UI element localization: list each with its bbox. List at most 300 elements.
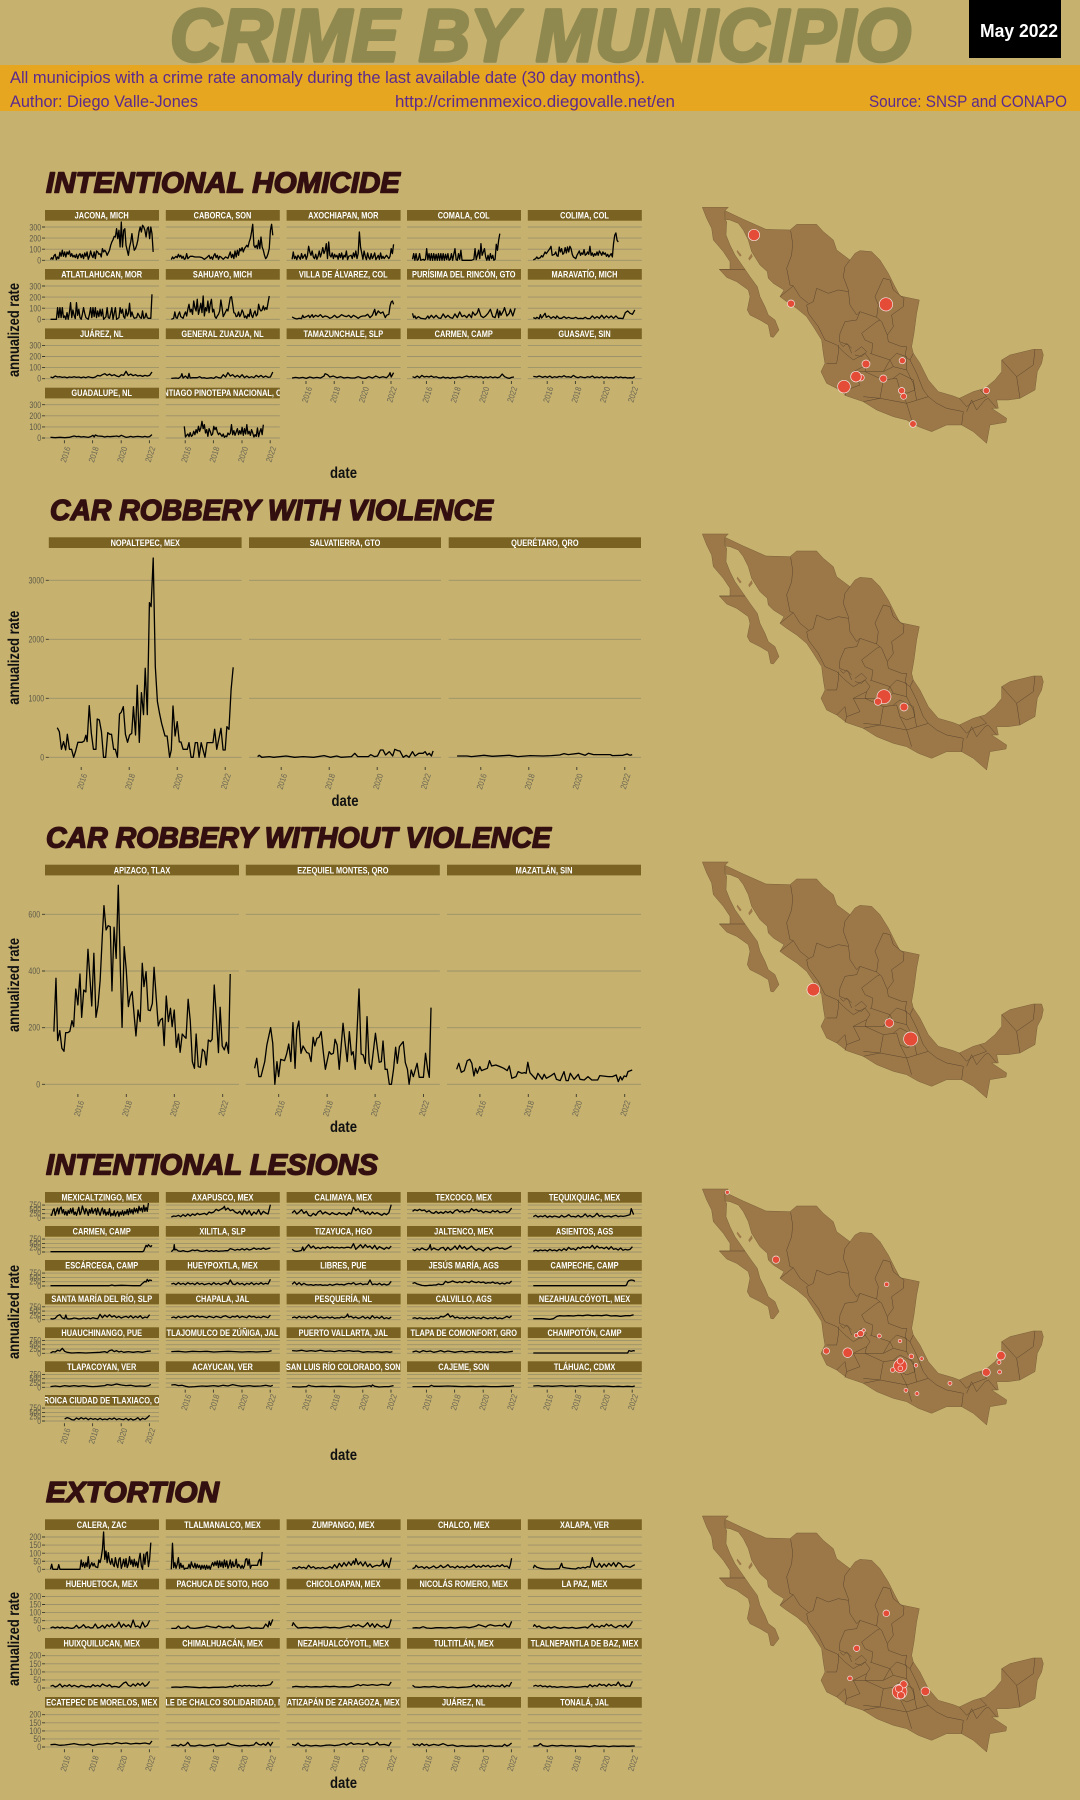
panel: Tamazunchale: 2020: [357, 385, 371, 404]
panel: Hueypoxtla: [166, 1260, 280, 1286]
panel: Apizaco: 2022: [216, 1099, 231, 1117]
panel: Calera: 150: [29, 1540, 42, 1550]
panel: Salvatierra: [249, 537, 441, 791]
panel: Heroica Ciudad de Tlaxiaco: 2020: [115, 1426, 130, 1445]
panel: Huauchinango: 500: [29, 1340, 42, 1350]
panel: Jacona: [29, 210, 159, 266]
panel: Jacona: JACONA, MICH: [75, 211, 129, 221]
panel: Tlahuac: 2016: [541, 1393, 556, 1412]
panel: Heroica Ciudad de Tlaxiaco: 0: [37, 1416, 42, 1426]
panel: Santiago Pinotepa Nacional: 2016: [179, 445, 194, 464]
panel: Guadalupe: 300: [29, 400, 42, 410]
panel: Huixquilucan: 150: [29, 1659, 42, 1669]
panel: Nopaltepec: 2022: [219, 772, 233, 790]
panel: Tamazunchale: 2016: [300, 385, 315, 404]
panel: Atlatlahucan: 300: [29, 281, 42, 292]
panel: Tonala: 2020: [598, 1754, 613, 1773]
info banner: All municipios with a crime rate anomaly during the last available date (30 day months).: [10, 68, 645, 87]
panel: Axapusco: [166, 1192, 280, 1218]
panel: Nicolas Romero: NICOLÁS ROMERO, MEX: [420, 1578, 508, 1589]
panel: Cajeme: CAJEME, SON: [438, 1362, 489, 1372]
panel: Ecatepec: 2020: [115, 1754, 130, 1773]
panel: Queretaro: 2018: [523, 772, 537, 791]
panel: Sahuayo: SAHUAYO, MICH: [193, 270, 252, 280]
panel: Tonala: [528, 1697, 642, 1773]
x axis title: date: [330, 465, 357, 482]
panel: Tamazunchale: [287, 328, 401, 404]
panel: La Paz: LA PAZ, MEX: [562, 1580, 608, 1589]
chart: intentional homicide small multiples: [6, 210, 642, 482]
heading: car robbery without violence: CAR ROBBERY WITHOUT VIOLENCE: [46, 822, 553, 854]
panel: Jacona: 300: [29, 222, 42, 233]
panel: Juarez (extortion): [407, 1697, 521, 1773]
panel: Juarez (extortion): 2018: [449, 1754, 463, 1773]
panel: Guasave: 2016: [541, 385, 556, 404]
panel: Huehuetoca: 150: [29, 1600, 42, 1610]
panel: Atlatlahucan: 100: [29, 303, 42, 314]
panel: Escarcega: [29, 1260, 159, 1291]
panel: Escarcega: 750: [29, 1268, 42, 1278]
panel: Villa de Alvarez: [287, 269, 401, 319]
panel: Juarez: 0: [37, 374, 42, 384]
panel: Guadalupe: 2020: [115, 445, 130, 464]
panel: Salvatierra: 2016: [275, 772, 290, 791]
panel: Juarez: JUÁREZ, NL: [80, 328, 123, 339]
panel: Guasave: GUASAVE, SIN: [558, 329, 611, 339]
panel: Heroica Ciudad de Tlaxiaco: 2016: [59, 1426, 73, 1445]
panel: Acayucan: [166, 1361, 280, 1412]
info banner: [0, 65, 1080, 111]
panel: Santiago Pinotepa Nacional: 2018: [208, 445, 222, 464]
panel: Santa Maria del Rio: 250: [29, 1311, 42, 1321]
panel: San Luis Rio Colorado: 2016: [300, 1393, 315, 1412]
panel: Tonala: 2016: [541, 1754, 556, 1773]
panel: Jacona: 200: [29, 233, 42, 244]
panel: Heroica Ciudad de Tlaxiaco: 500: [29, 1408, 42, 1418]
panel: Xalapa: [528, 1519, 642, 1569]
panel: Axochiapan: [287, 210, 401, 260]
panel: Acayucan: 2018: [208, 1393, 222, 1412]
panel: Texcoco: TEXCOCO, MEX: [435, 1193, 492, 1203]
panel: Salvatierra: 2018: [323, 772, 338, 791]
panel: Santa Maria del Rio: 750: [29, 1302, 42, 1312]
panel: Ezequiel Montes: 2016: [273, 1099, 287, 1118]
panel: Calimaya: CALIMAYA, MEX: [315, 1193, 373, 1203]
panel: Huixquilucan: 200: [29, 1651, 42, 1661]
panel: Santiago Pinotepa Nacional: 2020: [236, 445, 251, 464]
panel: Mexicaltzingo: 0: [37, 1213, 42, 1223]
panel: Guadalupe: 100: [29, 422, 42, 432]
panel: Escarcega: 500: [29, 1273, 42, 1283]
panel: Mexicaltzingo: MEXICALTZINGO, MEX: [61, 1193, 142, 1203]
panel: Acayucan: 2022: [264, 1393, 278, 1411]
panel: Huehuetoca: [29, 1579, 159, 1634]
x axis title: date: [332, 793, 359, 810]
map: extortion: [702, 1516, 1043, 1752]
panel: Ecatepec: 0: [37, 1742, 42, 1752]
panel: Nopaltepec: 0: [40, 752, 45, 763]
panel: Calvillo: CALVILLO, AGS: [436, 1295, 492, 1304]
panel: Apizaco: 2018: [120, 1099, 135, 1118]
panel: Texcoco: [407, 1192, 521, 1218]
panel: Cajeme: 2022: [505, 1393, 519, 1411]
panel: Tamazunchale: 2022: [385, 385, 399, 404]
chart: extortion small multiples: [6, 1519, 642, 1792]
panel: Tonala: 2022: [626, 1754, 640, 1772]
panel: Juarez: 300: [29, 341, 42, 351]
map: intentional lesions: [702, 1189, 1043, 1425]
panel: Queretaro: 2022: [619, 772, 633, 790]
panel: Valle de Chalco: VALLE DE CHALCO SOLIDARIDAD, MEX: [151, 1698, 294, 1708]
panel: Nopaltepec: [29, 537, 242, 791]
panel: Tlapacoyan: TLAPACOYAN, VER: [67, 1362, 136, 1372]
panel: Tlapa: [407, 1327, 521, 1353]
y axis title: annualized rate: [6, 938, 23, 1032]
y axis title: annualized rate: [6, 1592, 23, 1686]
panel: Nezahualcoyotl (lesions): NEZAHUALCÓYOTL, MEX: [539, 1292, 631, 1304]
panel: Huixquilucan: 50: [33, 1675, 42, 1685]
panel: Sahuayo: [166, 269, 280, 319]
panel: Heroica Ciudad de Tlaxiaco: 250: [29, 1412, 42, 1422]
panel: Huehuetoca: HUEHUETOCA, MEX: [66, 1580, 138, 1589]
panel: Acayucan: 2016: [179, 1393, 194, 1412]
heading: car robbery with violence: CAR ROBBERY WITH VIOLENCE: [50, 495, 495, 527]
panel: Atlatlahucan: [29, 269, 159, 325]
panel: Santa Maria del Rio: 500: [29, 1306, 42, 1316]
panel: Ecatepec: 50: [33, 1734, 42, 1744]
panel: Maravatio: [528, 269, 642, 319]
panel: Tequixquiac: [528, 1192, 642, 1218]
panel: Tonala: 2018: [570, 1754, 584, 1773]
panel: Juarez: 100: [29, 363, 42, 373]
panel: Guadalupe: 200: [29, 411, 42, 421]
panel: Carmen: CARMEN, CAMP: [435, 329, 493, 339]
panel: Cajeme: 2016: [421, 1393, 435, 1412]
panel: Tultitlan: TULTITLÁN, MEX: [434, 1638, 494, 1649]
x axis title: date: [330, 1447, 357, 1464]
panel: Queretaro: 2016: [475, 772, 489, 791]
panel: Escarcega: ESCÁRCEGA, CAMP: [65, 1260, 139, 1271]
panel: Juarez: 200: [29, 352, 42, 362]
panel: Asientos: ASIENTOS, AGS: [556, 1227, 614, 1237]
panel: Nopaltepec: 1000: [29, 693, 45, 704]
panel: Carmen (lesions): 250: [29, 1243, 42, 1253]
panel: Tlapacoyan: [29, 1361, 159, 1393]
panel: Campeche: [528, 1260, 642, 1286]
panel: Tlajomulco: TLAJOMULCO DE ZÚÑIGA, JAL: [167, 1326, 278, 1338]
panel: Hueypoxtla: HUEYPOXTLA, MEX: [187, 1261, 258, 1271]
panel: Cajeme: 2020: [477, 1393, 492, 1412]
panel: Heroica Ciudad de Tlaxiaco: [29, 1395, 170, 1445]
heading: intentional homicide: INTENTIONAL HOMICIDE: [46, 168, 402, 200]
panel: Apizaco: APIZACO, TLAX: [114, 866, 171, 875]
panel: Santiago Pinotepa Nacional: 2022: [264, 445, 278, 463]
panel: Ezequiel Montes: 2022: [417, 1099, 431, 1117]
panel: Heroica Ciudad de Tlaxiaco: 2018: [87, 1426, 101, 1445]
panel: Huixquilucan: 0: [37, 1683, 42, 1693]
panel: Zumpango: ZUMPANGO, MEX: [312, 1520, 375, 1530]
panel: Huehuetoca: 100: [29, 1608, 42, 1618]
panel: Pesqueria: PESQUERÍA, NL: [315, 1293, 372, 1304]
panel: Apizaco: 2016: [72, 1099, 87, 1118]
panel: Tlapa: TLAPA DE COMONFORT, GRO: [411, 1328, 518, 1338]
panel: Mazatlan: 2016: [474, 1099, 489, 1118]
panel: Nopaltepec: NOPALTEPEC, MEX: [111, 538, 180, 548]
panel: Guadalupe: 2016: [59, 445, 73, 464]
panel: Tlahuac: 2018: [570, 1393, 584, 1412]
panel: Ecatepec: 200: [29, 1710, 42, 1720]
panel: Huauchinango: HUAUCHINANGO, PUE: [61, 1328, 143, 1338]
panel: Queretaro: [449, 537, 641, 791]
panel: Carmen (lesions): 0: [37, 1247, 42, 1257]
panel: Valle de Chalco: 2022: [264, 1754, 278, 1772]
panel: Villa de Alvarez: VILLA DE ÁLVAREZ, COL: [299, 269, 388, 280]
panel: Mazatlan: 2020: [570, 1099, 585, 1118]
panel: Heroica Ciudad de Tlaxiaco: 750: [29, 1403, 42, 1413]
panel: Mexicaltzingo: 750: [29, 1200, 42, 1210]
panel: Mazatlan: 2018: [522, 1099, 537, 1118]
panel: Carmen: 2020: [477, 385, 492, 404]
panel: Nicolas Romero: [407, 1578, 521, 1629]
y axis title: annualized rate: [6, 1265, 23, 1359]
panel: Carmen (lesions): 750: [29, 1234, 42, 1244]
panel: General Zuazua: [166, 328, 280, 379]
heading: extortion: EXTORTION: [46, 1477, 220, 1509]
x axis title: date: [330, 1775, 357, 1792]
panel: Carmen: 2022: [505, 385, 519, 404]
panel: Caborca: [166, 210, 280, 260]
panel: Santiago Pinotepa Nacional: [153, 388, 292, 464]
panel: Nezahualcoyotl (extortion): NEZAHUALCÓYOTL, MEX: [298, 1637, 389, 1649]
panel: Colima: COLIMA, COL: [560, 211, 609, 221]
map: intentional homicide: [702, 207, 1043, 443]
panel: Chimalhuacan: CHIMALHUACÁN, MEX: [182, 1638, 263, 1649]
panel: Apizaco: 0: [36, 1079, 41, 1090]
panel: Tlahuac: [528, 1361, 642, 1412]
panel: Champoton: [528, 1326, 642, 1353]
panel: Huauchinango: [29, 1327, 159, 1359]
panel: Guadalupe: GUADALUPE, NL: [71, 389, 132, 398]
panel: Santa Maria del Rio: [29, 1293, 159, 1325]
panel: Ezequiel Montes: EZEQUIEL MONTES, QRO: [297, 866, 389, 875]
panel: Xilitla: [166, 1226, 280, 1252]
panel: Carmen (lesions): 500: [29, 1239, 42, 1249]
panel: Carmen: 2018: [449, 385, 463, 404]
panel: Ecatepec: 2018: [87, 1754, 101, 1773]
panel: Cajeme: [407, 1361, 521, 1412]
panel: Pachuca: PACHUCA DE SOTO, HGO: [177, 1580, 269, 1589]
panel: Chalco: CHALCO, MEX: [438, 1520, 490, 1530]
panel: Tamazunchale: TAMAZUNCHALE, SLP: [303, 329, 384, 339]
panel: Salvatierra: 2020: [371, 772, 386, 791]
panel: Tlapacoyan: 750: [29, 1370, 42, 1380]
panel: Calera: CALERA, ZAC: [77, 1520, 127, 1530]
panel: Calera: 0: [37, 1564, 42, 1575]
panel: Escarcega: 0: [37, 1281, 42, 1291]
panel: Guasave: 2020: [598, 385, 613, 404]
chart: intentional lesions small multiples: [6, 1192, 642, 1464]
panel: Santa Maria del Rio: SANTA MARÍA DEL RÍO, SLP: [51, 1293, 153, 1304]
panel: Purisima del Rincon: [407, 268, 521, 319]
panel: Juarez (extortion): JUÁREZ, NL: [442, 1697, 485, 1708]
panel: Huixquilucan: 100: [29, 1667, 42, 1677]
panel: Tlahuac: TLÁHUAC, CDMX: [554, 1361, 616, 1372]
panel: Jesus Maria: JESÚS MARÍA, AGS: [429, 1259, 499, 1271]
panel: Tlahuac: 2020: [598, 1393, 613, 1412]
panel: San Luis Rio Colorado: 2022: [385, 1393, 399, 1411]
panel: Guasave: 2018: [570, 385, 584, 404]
panel: Tlapacoyan: 0: [37, 1382, 42, 1393]
panel: Mexicaltzingo: 500: [29, 1205, 42, 1215]
panel: Calera: [29, 1519, 159, 1575]
panel: Axochiapan: AXOCHIAPAN, MOR: [308, 211, 379, 221]
panel: Jesus Maria: [407, 1259, 521, 1286]
heading: intentional lesions: INTENTIONAL LESIONS: [46, 1150, 379, 1182]
info banner: Author: Diego Valle-Jones: [10, 92, 198, 111]
panel: Huauchinango: 0: [37, 1348, 42, 1359]
panel: Pachuca: [166, 1579, 280, 1629]
panel: Juarez (extortion): 2022: [505, 1754, 519, 1772]
panel: Tlalnepantla: TLALNEPANTLA DE BAZ, MEX: [531, 1639, 639, 1649]
panel: Ecatepec: 2016: [59, 1754, 73, 1773]
panel: Valle de Chalco: 2016: [179, 1754, 194, 1773]
panel: Atizapan: [287, 1697, 401, 1773]
panel: Campeche: CAMPECHE, CAMP: [551, 1261, 619, 1271]
panel: Tizayuca: TIZAYUCA, HGO: [315, 1227, 373, 1237]
panel: Chapala: [166, 1294, 280, 1320]
panel: Huixquilucan: HUIXQUILUCAN, MEX: [63, 1639, 140, 1649]
panel: Apizaco: 600: [28, 909, 41, 920]
panel: Guadalupe: [29, 388, 159, 464]
panel: Maravatio: MARAVATÍO, MICH: [552, 269, 618, 280]
panel: Juarez (extortion): 2020: [477, 1754, 492, 1773]
chart: car robbery with violence: [6, 537, 641, 810]
panel: Calera: 200: [29, 1532, 42, 1542]
panel: Escarcega: 250: [29, 1277, 42, 1287]
panel: Nopaltepec: 2018: [123, 772, 138, 791]
panel: Pesqueria: [287, 1293, 401, 1320]
panel: Queretaro: 2020: [571, 772, 585, 791]
panel: San Luis Rio Colorado: [286, 1361, 401, 1412]
panel: Nopaltepec: 2020: [171, 772, 186, 791]
panel: Xalapa: XALAPA, VER: [560, 1520, 609, 1530]
panel: Nopaltepec: 2000: [29, 634, 45, 645]
panel: Carmen (lesions): [29, 1226, 159, 1257]
panel: Apizaco: [28, 865, 239, 1118]
panel: Huehuetoca: 200: [29, 1592, 42, 1602]
panel: Chalco: [407, 1519, 521, 1569]
panel: Guadalupe: 2022: [143, 445, 157, 463]
panel: Huixquilucan: [29, 1638, 159, 1693]
panel: Huehuetoca: 50: [33, 1616, 42, 1626]
panel: Asientos: [528, 1226, 642, 1252]
panel: Tlajomulco: [166, 1326, 280, 1353]
panel: Tultitlan: [407, 1638, 521, 1688]
panel: Mazatlan: 2022: [618, 1099, 633, 1117]
info banner: http://crimenmexico.diegovalle.net/en: [395, 92, 675, 111]
panel: Tlalnepantla: [528, 1638, 642, 1688]
panel: Ecatepec: ECATEPEC DE MORELOS, MEX: [46, 1698, 158, 1708]
panel: Queretaro: QUERÉTARO, QRO: [511, 537, 579, 548]
panel: Caborca: CABORCA, SON: [194, 211, 251, 221]
panel: Tlapacoyan: 250: [29, 1378, 42, 1388]
panel: Axapusco: AXAPUSCO, MEX: [192, 1193, 254, 1203]
panel: Carmen: [407, 328, 521, 404]
panel: Apizaco: 200: [28, 1023, 41, 1033]
panel: Carmen: 2016: [421, 385, 435, 404]
x axis title: date: [330, 1119, 357, 1136]
panel: Calera: 50: [33, 1556, 42, 1567]
panel: San Luis Rio Colorado: 2020: [357, 1393, 371, 1412]
date badge: May 2022: [980, 21, 1058, 41]
panel: Ecatepec: 100: [29, 1726, 42, 1736]
panel: Mexicaltzingo: [29, 1192, 159, 1223]
panel: Nopaltepec: 3000: [29, 575, 45, 586]
panel: Puerto Vallarta: PUERTO VALLARTA, JAL: [299, 1328, 388, 1338]
panel: Jacona: 100: [29, 244, 42, 255]
panel: Salvatierra: 2022: [419, 772, 433, 790]
panel: Nezahualcoyotl (extortion): [287, 1637, 401, 1688]
panel: Apizaco: 400: [28, 966, 41, 976]
panel: Jacona: 0: [37, 255, 42, 266]
panel: Ezequiel Montes: [246, 865, 440, 1118]
panel: Atizapan: 2016: [300, 1754, 315, 1773]
panel: Heroica Ciudad de Tlaxiaco: 2022: [143, 1427, 157, 1445]
panel: Champoton: CHAMPOTÓN, CAMP: [547, 1326, 622, 1338]
panel: Tlalmanalco: [166, 1519, 280, 1569]
panel: Huehuetoca: 0: [37, 1624, 42, 1634]
panel: Acayucan: ACAYUCAN, VER: [192, 1362, 253, 1372]
panel: La Paz: [528, 1579, 642, 1629]
panel: Huauchinango: 250: [29, 1344, 42, 1354]
panel: Libres: [287, 1260, 401, 1286]
y axis title: annualized rate: [6, 283, 23, 377]
panel: Mazatlan: MAZATLÁN, SIN: [516, 865, 572, 875]
panel: Tonala: TONALÁ, JAL: [560, 1697, 609, 1708]
date badge: [969, 0, 1061, 58]
panel: General Zuazua: GENERAL ZUAZUA, NL: [181, 329, 264, 339]
panel: Valle de Chalco: 2020: [236, 1754, 251, 1773]
panel: Calvillo: [407, 1294, 521, 1320]
panel: Tamazunchale: 2018: [328, 385, 343, 404]
panel: Chimalhuacan: [166, 1638, 280, 1688]
panel: San Luis Rio Colorado: 2018: [328, 1393, 343, 1412]
panel: Ezequiel Montes: 2018: [321, 1099, 335, 1118]
panel: Carmen (lesions): CARMEN, CAMP: [73, 1227, 131, 1237]
panel: Tlalmanalco: TLALMANALCO, MEX: [184, 1520, 261, 1530]
panel: Apizaco: 2020: [168, 1099, 183, 1118]
panel: Atizapan: 2018: [328, 1754, 343, 1773]
panel: Juarez: [29, 328, 159, 384]
panel: Ecatepec: 150: [29, 1718, 42, 1728]
panel: Atlatlahucan: 200: [29, 292, 42, 303]
panel: Valle de Chalco: [151, 1697, 294, 1773]
chart: car robbery without violence: [6, 865, 641, 1136]
panel: Acayucan: 2020: [236, 1393, 251, 1412]
map: car robbery without violence: [702, 862, 1043, 1098]
panel: Mazatlan: [447, 865, 641, 1118]
panel: Nopaltepec: 2016: [75, 772, 90, 791]
panel: Chicoloapan: CHICOLOAPAN, MEX: [306, 1580, 381, 1589]
panel: Calera: 100: [29, 1548, 42, 1559]
panel: Guasave: 2022: [626, 385, 640, 404]
panel: Nezahualcoyotl (lesions): [528, 1292, 642, 1320]
panel: Zumpango: [287, 1519, 401, 1569]
panel: Atizapan: 2020: [357, 1754, 371, 1773]
panel: Guadalupe: 2018: [87, 445, 101, 464]
panel: Atizapan: ATIZAPÁN DE ZARAGOZA, MEX: [287, 1697, 400, 1708]
panel: Comala: COMALA, COL: [438, 211, 490, 221]
